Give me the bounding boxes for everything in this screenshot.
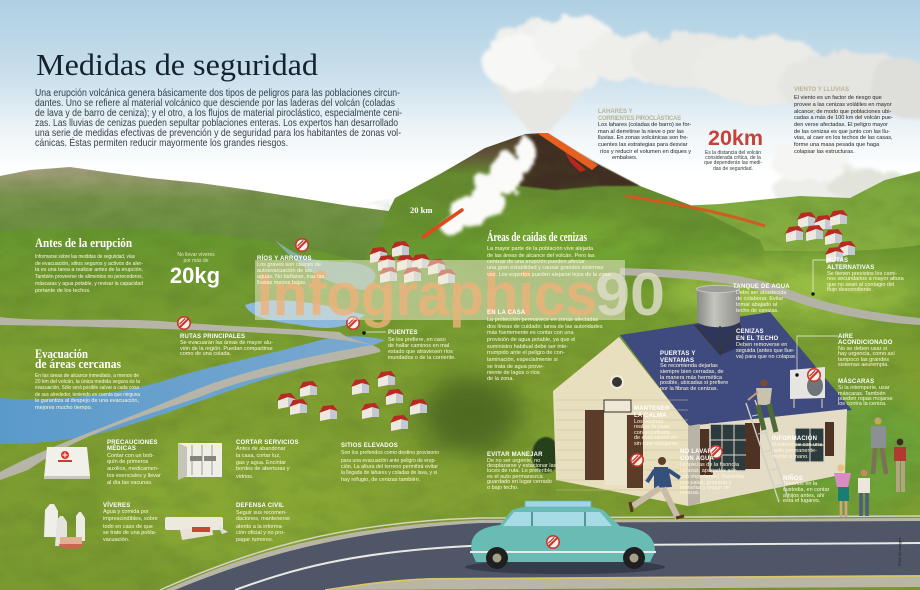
leader lines [362, 260, 838, 377]
intro paragraph: de lava y de barro de ceniza); y el otro, a los flujos de material piroclástico, especialmente ceni- [35, 108, 402, 119]
text: tanque de agua: TANQUE DE AGUA [733, 284, 790, 290]
text: precauciones medicas: PRECAUCIONES [107, 440, 158, 446]
caption for 20km [704, 150, 762, 172]
text: evitar manejar [487, 452, 557, 491]
text: cenizas en el techo [736, 329, 797, 360]
sky background [0, 0, 920, 154]
text: viento y lluvias: El viento es un factor de riesgo que [794, 95, 882, 101]
text: viento y lluvias: colapsar las estructuras. [794, 149, 855, 155]
text: en la casa: se trata de agua prove- [487, 364, 544, 370]
text: lahares: CORRIENTES PIROCLÁSTICAS [598, 115, 681, 122]
text: sitios elevados: ción. La altura del terreno permitirá evitar [341, 464, 438, 470]
right hills [690, 171, 920, 252]
car [465, 501, 665, 574]
stat: 20kg: por más de [183, 258, 209, 264]
text: informacion: Mantenerse con una [772, 442, 823, 448]
distant mountains left [0, 167, 389, 263]
text: ninos [783, 475, 830, 504]
caption for 20km: Es la distancia del volcán [705, 150, 761, 156]
text: no lavar con agua: con palas, preparar y [680, 480, 732, 486]
intro paragraph: cánicas. Éstas permiten reducir mayormente los grandes riesgos. [35, 136, 288, 149]
intro paragraph: dantes. Uno se refiere al material volcánico que desciende por las laderas del volcán (coladas [35, 98, 395, 109]
text: cenizas en el techo: EN EL TECHO [736, 336, 779, 342]
stat: 20kg: 20kg [170, 263, 220, 288]
low cloud on the right [772, 150, 904, 198]
bottom road [160, 516, 920, 590]
round vent [611, 376, 623, 388]
text: rutas alternativas: que no sean al contagio del [827, 282, 894, 288]
text: no lavar con agua: retirarlas y seguir de [680, 485, 730, 491]
shrub [532, 437, 560, 473]
text: rutas alternativas: RUTAS [827, 258, 848, 264]
text: viveres: VÍVERES [103, 501, 130, 509]
window right [795, 428, 824, 462]
text: rutas alternativas: flujo descendiente. [827, 287, 873, 293]
text: viento y lluvias: cadas a más de 100 km del volcán pue- [794, 115, 893, 121]
text: no lavar con agua: NO LAVAR [680, 449, 713, 455]
volcano lava flows [537, 133, 598, 172]
text: cortar servicios: bordes de aberturas y [236, 466, 290, 472]
text: ninos: NIÑOS [783, 475, 803, 482]
text: ninos: Tenerlos en la [783, 481, 818, 487]
text: rios y arroyos: autoevacuación de las [257, 268, 312, 274]
corner wall shadow [688, 424, 700, 506]
text: rutas alternativas: ALTERNATIVAS [827, 265, 874, 271]
text: precauciones medicas: tos esenciales y llevar [107, 473, 161, 479]
text: cortar servicios: CORTAR SERVICIOS [236, 440, 299, 446]
section: evacuacion: mejores mucho tiempo. [35, 405, 93, 411]
right village [785, 210, 856, 263]
section: areas de caidas de cenizas [487, 230, 613, 278]
text: mantener la calma: LA CALMA [634, 413, 667, 419]
ladder [746, 400, 788, 502]
text: viveres [103, 501, 158, 543]
house side wing [688, 409, 847, 506]
watermark: Infographics [257, 261, 597, 328]
text: defensa civil: DEFENSA CIVIL [236, 503, 284, 509]
text: mascaras: máscaras. También [838, 391, 886, 397]
river and lake [0, 240, 385, 444]
section: evacuacion: 20 km del volcán, la única medida segura es la [35, 379, 141, 385]
text: puertas y ventanas [660, 351, 728, 392]
caption for 20km: considerada crítica, de la [705, 155, 761, 161]
text: tanque de agua: de colaborar. Evitar [736, 296, 784, 302]
distance label 100 km: 100 km [704, 194, 731, 204]
section: antes de la erupcion: máscaras y agua potable, y revisar la capacidad [35, 281, 143, 287]
text: mascaras [838, 378, 893, 407]
text: puertas y ventanas: la manera más hermética [660, 375, 723, 381]
text: cenizas en el techo: CENIZAS [736, 329, 764, 335]
food and water bottles icon [44, 504, 85, 549]
text: rutas principales: vión de la región. Puedan compartirse [180, 346, 273, 352]
text: rutas alternativas: Se tienen previstos los cami- [827, 271, 897, 277]
20 km lava line [423, 210, 462, 237]
text: defensa civil: ción oficial y no pro- [236, 530, 285, 536]
text: viveres: imprescindibles, sobre [103, 516, 158, 522]
section: areas de caidas de cenizas: La mayor parte de la población vive alejada [487, 246, 594, 252]
text: informacion [772, 434, 823, 460]
stat: 20kg: No llevar víveres [177, 252, 215, 258]
text: no lavar con agua: Limpiezas de la fisonoía [680, 462, 740, 468]
text: rios y arroyos: Los graves son cauces de [257, 262, 321, 268]
section: evacuacion: En las áreas de alcance inmediato, a menos de [35, 373, 139, 379]
text: rios y arroyos: aguas. No bañarse, tras las [257, 274, 325, 280]
distance label 20 km: 20 km [410, 205, 432, 215]
text: tanque de agua: techo de cenizas. [736, 308, 779, 314]
section: evacuacion: de sus alrededor, teniendo en cuenta que ninguna [35, 392, 141, 398]
man on ladder [748, 379, 776, 432]
text: viento y lluvias: vias, al caer en los techos de las casas, [794, 135, 893, 141]
text: no lavar con agua: cenizas. [680, 490, 701, 496]
text: en la casa: dos líneas de cuidado: tarea de las autoridades [487, 324, 603, 330]
text: rutas alternativas [827, 258, 905, 293]
stat: 20km: 20km [708, 126, 763, 150]
section: evacuacion: evacuación. Sólo será posible salvar a cada cosa [35, 385, 140, 391]
text: mantener la calma [634, 406, 680, 447]
text: aire acondicionado: hay urgencia, como así [838, 351, 895, 357]
text: lahares: LAHARES Y [598, 109, 633, 115]
text: puentes: estado que atraviesen ríos [388, 349, 453, 355]
section: evacuacion: Evacuación [35, 347, 88, 361]
text: cenizas en el techo: Deben removerse en [736, 342, 787, 348]
text: rios y arroyos [257, 254, 325, 286]
watermark: 90 [595, 261, 665, 328]
text: ninos: esta el lugares. [783, 498, 821, 504]
text: viento y lluvias: de las cenizas es que junto con las llu- [794, 129, 890, 135]
text: defensa civil: daciones, mantenerse [236, 516, 290, 522]
text: puentes [388, 330, 456, 361]
text: mantener la calma: realice la casa [634, 424, 670, 430]
text: en la casa: rrumpido ante el peligro de con- [487, 350, 565, 356]
lower village [277, 371, 428, 431]
text: viveres: se trate de una pobla- [103, 530, 157, 536]
caption for 20km: das de seguridad. [713, 166, 753, 172]
text: viento y lluvias: alcance; de modo que poblaciones ubi- [794, 109, 891, 115]
text: cenizas en el techo: va) para que no colapse. [736, 354, 797, 360]
section: evacuacion [35, 347, 141, 411]
text: lahares: man al derretirse la nieve o por las [598, 129, 684, 135]
text: no lavar con agua: son importantes. Barrerlas [680, 474, 745, 480]
text: mascaras: los contra la ceniza. [838, 401, 887, 407]
title: Medidas de seguridad [36, 47, 319, 82]
section: antes de la erupcion: ta es una tarea a realizar antes de la erupción. [35, 267, 143, 273]
text: viveres: Agua y comida por [103, 509, 149, 515]
text: aire acondicionado [838, 334, 895, 368]
text: tanque de agua: tomar abajado al [736, 302, 777, 308]
intro paragraph [35, 88, 402, 149]
section: antes de la erupcion: Antes de la erupción [35, 236, 132, 250]
section: antes de la erupcion [35, 236, 143, 294]
first-aid kit icon [44, 447, 90, 479]
text: rios y arroyos: lluvias menos bajas. [257, 280, 307, 286]
text: mascaras: pueden ropas mojarse [838, 396, 893, 402]
terrain texture [0, 130, 920, 590]
intro paragraph: zas. Las lluvias de cenizas pueden sepultar poblaciones enteras. Los expertos han desarrollado [35, 118, 398, 129]
text: mantener la calma: con el pañuelo [634, 430, 670, 436]
text: cortar servicios: Antes de abandonar [236, 446, 286, 452]
house [553, 312, 852, 506]
text: mantener la calma: MANTENER [634, 406, 670, 412]
text: en la casa: niente de lagos o ríos [487, 370, 540, 376]
text: mascaras: MÁSCARAS [838, 378, 874, 385]
100 km lava line [625, 196, 765, 226]
main ground [0, 228, 920, 590]
text: mascaras: Si la intemperie, usar [838, 385, 890, 391]
section: antes de la erupcion: de evacuación, sitios seguros y activos de aler- [35, 261, 143, 267]
text: cortar servicios: la casa, cortar luz, [236, 453, 281, 459]
text: viveres: todo en caso de que [103, 524, 153, 530]
text: precauciones medicas [107, 440, 161, 486]
text: sitios elevados: para una evacuación ante peligro de erup- [341, 458, 436, 464]
text: puertas y ventanas: VENTANAS [660, 358, 694, 364]
section: evacuacion: le garantiza al despejo de una evacuación, [35, 398, 139, 404]
text: evitar manejar: EVITAR MANEJAR [487, 452, 543, 458]
section: antes de la erupcion: portante de los techos. [35, 288, 91, 294]
text: en la casa: La protección permanece en zonas afectadas [487, 317, 599, 323]
text: precauciones medicas: MÉDICAS [107, 444, 136, 452]
text: precauciones medicas: auxilios, medicamen- [107, 466, 159, 472]
stat: 20kg [170, 252, 220, 288]
text: precauciones medicas: quín de primeros [107, 459, 149, 465]
text: aire acondicionado: sistemas aeurempia. [838, 362, 889, 368]
text: mantener la calma: de evacuación en [634, 435, 677, 441]
text: defensa civil: atento a la informa- [236, 524, 284, 530]
text: viento y lluvias: VIENTO Y LLUVIAS [794, 87, 849, 93]
section: evacuacion: de áreas cercanas [35, 357, 121, 371]
text: puentes: inundados o de la corriente. [388, 355, 456, 361]
text: en la casa: de la zona. [487, 376, 514, 382]
text: cenizas en el techo: seguida (antes que llue- [736, 348, 795, 354]
text: aire acondicionado: No se deben usar si [838, 346, 887, 352]
section: areas de caidas de cenizas: Áreas de caídas de cenizas [487, 230, 587, 244]
text: tanque de agua [733, 284, 790, 314]
text: cortar servicios: vidrios. [236, 474, 254, 480]
text: puertas y ventanas: PUERTAS Y [660, 351, 696, 357]
text: rutas principales: RUTAS PRINCIPALES [180, 334, 245, 340]
no-go icons [177, 238, 821, 549]
text: viento y lluvias [794, 87, 893, 155]
text: informacion: INFORMACIÓN [772, 434, 817, 442]
text: cortar servicios: gas y agua. Encintar [236, 460, 286, 466]
text: puertas y ventanas: por la fibras de cenizas. [660, 386, 719, 392]
credit: ©Sol 90 Images [897, 537, 902, 566]
text: rios y arroyos: RÍOS Y ARROYOS [257, 254, 312, 262]
text: puertas y ventanas: posible, ubicadas si prefiere [660, 380, 728, 386]
running man [630, 457, 684, 518]
text: lahares: Los lahares (coladas de barro) se for- [598, 122, 691, 128]
text: evitar manejar: o bajo techo. [487, 485, 519, 491]
house gable wall [553, 337, 690, 506]
text: en la casa: taminación, especialmente si [487, 357, 558, 363]
text: ninos: a hijos antes, ahí [783, 493, 825, 499]
text: en la casa: suministro habitual debe ser inte- [487, 344, 568, 350]
village near lake [369, 241, 456, 285]
right road [620, 268, 920, 325]
section: areas de caidas de cenizas: cenizas de una erupción pueden afectar [487, 259, 585, 265]
text: sitios elevados: hay refugio, de cenizas también. [341, 477, 421, 483]
text: lahares: ríos y reducir el volumen en diques y [600, 149, 691, 155]
text: viento y lluvias: den verse afectadas. El peligro mayor [794, 122, 888, 128]
text: cortar servicios [236, 440, 299, 480]
section: areas de caidas de cenizas: una gran estabilidad y causar grandes sistemas [487, 265, 604, 271]
text: viveres: vacuación. [103, 537, 130, 543]
intro paragraph: una serie de medidas efectivas de prevención y de seguridad para los habitantes de zonas vol- [35, 128, 401, 139]
volcano dark crater slope [508, 134, 640, 190]
eruption cloud [482, 16, 920, 132]
section: antes de la erupcion: Informarse sobre las medidas de seguridad, vías [35, 254, 135, 260]
text: aire acondicionado: tampoco las grandes [838, 357, 889, 363]
text: no lavar con agua [680, 449, 745, 496]
text: evitar manejar: es el auto permanezca [487, 474, 544, 480]
text: aire acondicionado: AIRE [838, 334, 853, 340]
text: lahares: cuentes las estrategias para desviar [598, 142, 688, 148]
section: antes de la erupcion: También proveerse de alimentos no perecederos, [35, 274, 143, 280]
text: sitios elevados: Son los preferidos como destino provisorio [341, 450, 439, 456]
text: evitar manejar: guardado en lugar cerrado [487, 479, 552, 485]
text: en la casa: provisión de agua potable, ya que el [487, 337, 575, 343]
text: precauciones medicas: Contar con un boti- [107, 453, 154, 459]
text: defensa civil [236, 503, 290, 543]
window left [700, 429, 713, 475]
text: precauciones medicas: al día las vacunas. [107, 480, 153, 486]
radio and flashlight icon [165, 517, 228, 540]
text: sitios elevados: la llegada de lahares y coladas de lava, y si [341, 470, 437, 476]
white pyroclastic flow [440, 137, 536, 235]
text: informacion: radio permanente- [772, 448, 817, 454]
text: en la casa: EN LA CASA [487, 310, 526, 316]
volcano [365, 133, 764, 278]
section: areas de caidas de cenizas: de las áreas de alcance del volcán. Pero las [487, 253, 595, 259]
text: rutas alternativas: nos secundarios a mayor altura [827, 276, 905, 282]
text: rutas principales: Se evacuarán las áreas de mayor alu- [180, 340, 273, 346]
intro paragraph: Una erupción volcánica genera básicamente dos tipos de peligros para las poblaciones circun- [35, 88, 400, 99]
text: puertas y ventanas: siempre bien cerradas, de [660, 369, 724, 375]
text: sitios elevados: SITIOS ELEVADOS [341, 443, 398, 449]
text: lahares: lluvias. En zonas volcánicas son fre- [598, 135, 688, 141]
text: evitar manejar: desplazarse y estacionar las [487, 463, 557, 469]
text: mantener la calma: sin caer ahogarse. [634, 441, 680, 447]
fuse panel icon [178, 443, 222, 480]
text: defensa civil: pagar rumores. [236, 537, 274, 543]
text: defensa civil: Seguir sus recomen- [236, 510, 287, 516]
main road [0, 317, 380, 480]
text: en la casa [487, 310, 603, 382]
text: puentes: Se los prefiere, en caso [388, 337, 446, 343]
text: puertas y ventanas: Se recomienda dejarlas [660, 363, 718, 369]
text: tanque de agua: Debe ser abastecida [736, 290, 787, 296]
air conditioner unit [790, 367, 825, 408]
text: no lavar con agua: cenizas, apagadas aún [680, 468, 737, 474]
section: areas de caidas de cenizas: vez. Los expertos pueden alejarse lejos de la zona. [487, 272, 613, 278]
text: informacion: mente a mano. [772, 454, 809, 460]
house roof [620, 312, 852, 428]
door and shutters [585, 410, 604, 480]
ground shading [110, 218, 920, 560]
text: evitar manejar: De no ser urgente, no [487, 458, 540, 464]
text: rutas principales [180, 334, 273, 357]
text: lahares [598, 109, 691, 161]
text: aire acondicionado: ACONDICIONADO [838, 340, 893, 346]
text: en la casa: más fuertemente es contar con una [487, 330, 574, 336]
text: ninos: custodia, en contar [783, 487, 830, 493]
text: mantener la calma: Los vecinos [634, 419, 663, 425]
people group [834, 417, 906, 517]
text: puentes: PUENTES [388, 330, 418, 336]
text: no lavar con agua: CON AGUA [680, 456, 715, 462]
water tank [694, 285, 745, 355]
text: rutas principales: como de una colada. [180, 351, 232, 357]
caption for 20km: que dependerán las medi- [704, 160, 762, 166]
text: lahares: embalses. [612, 155, 638, 161]
text: evitar manejar: luces de ruta. Lo preferible [487, 468, 552, 474]
text: sitios elevados [341, 443, 439, 483]
text: viento y lluvias: forme una masa pesada que haga [794, 142, 880, 148]
text: puentes: de hallar caminos en mal [388, 343, 449, 349]
text: viento y lluvias: provee a las cenizas volátiles en mayor [794, 102, 892, 108]
